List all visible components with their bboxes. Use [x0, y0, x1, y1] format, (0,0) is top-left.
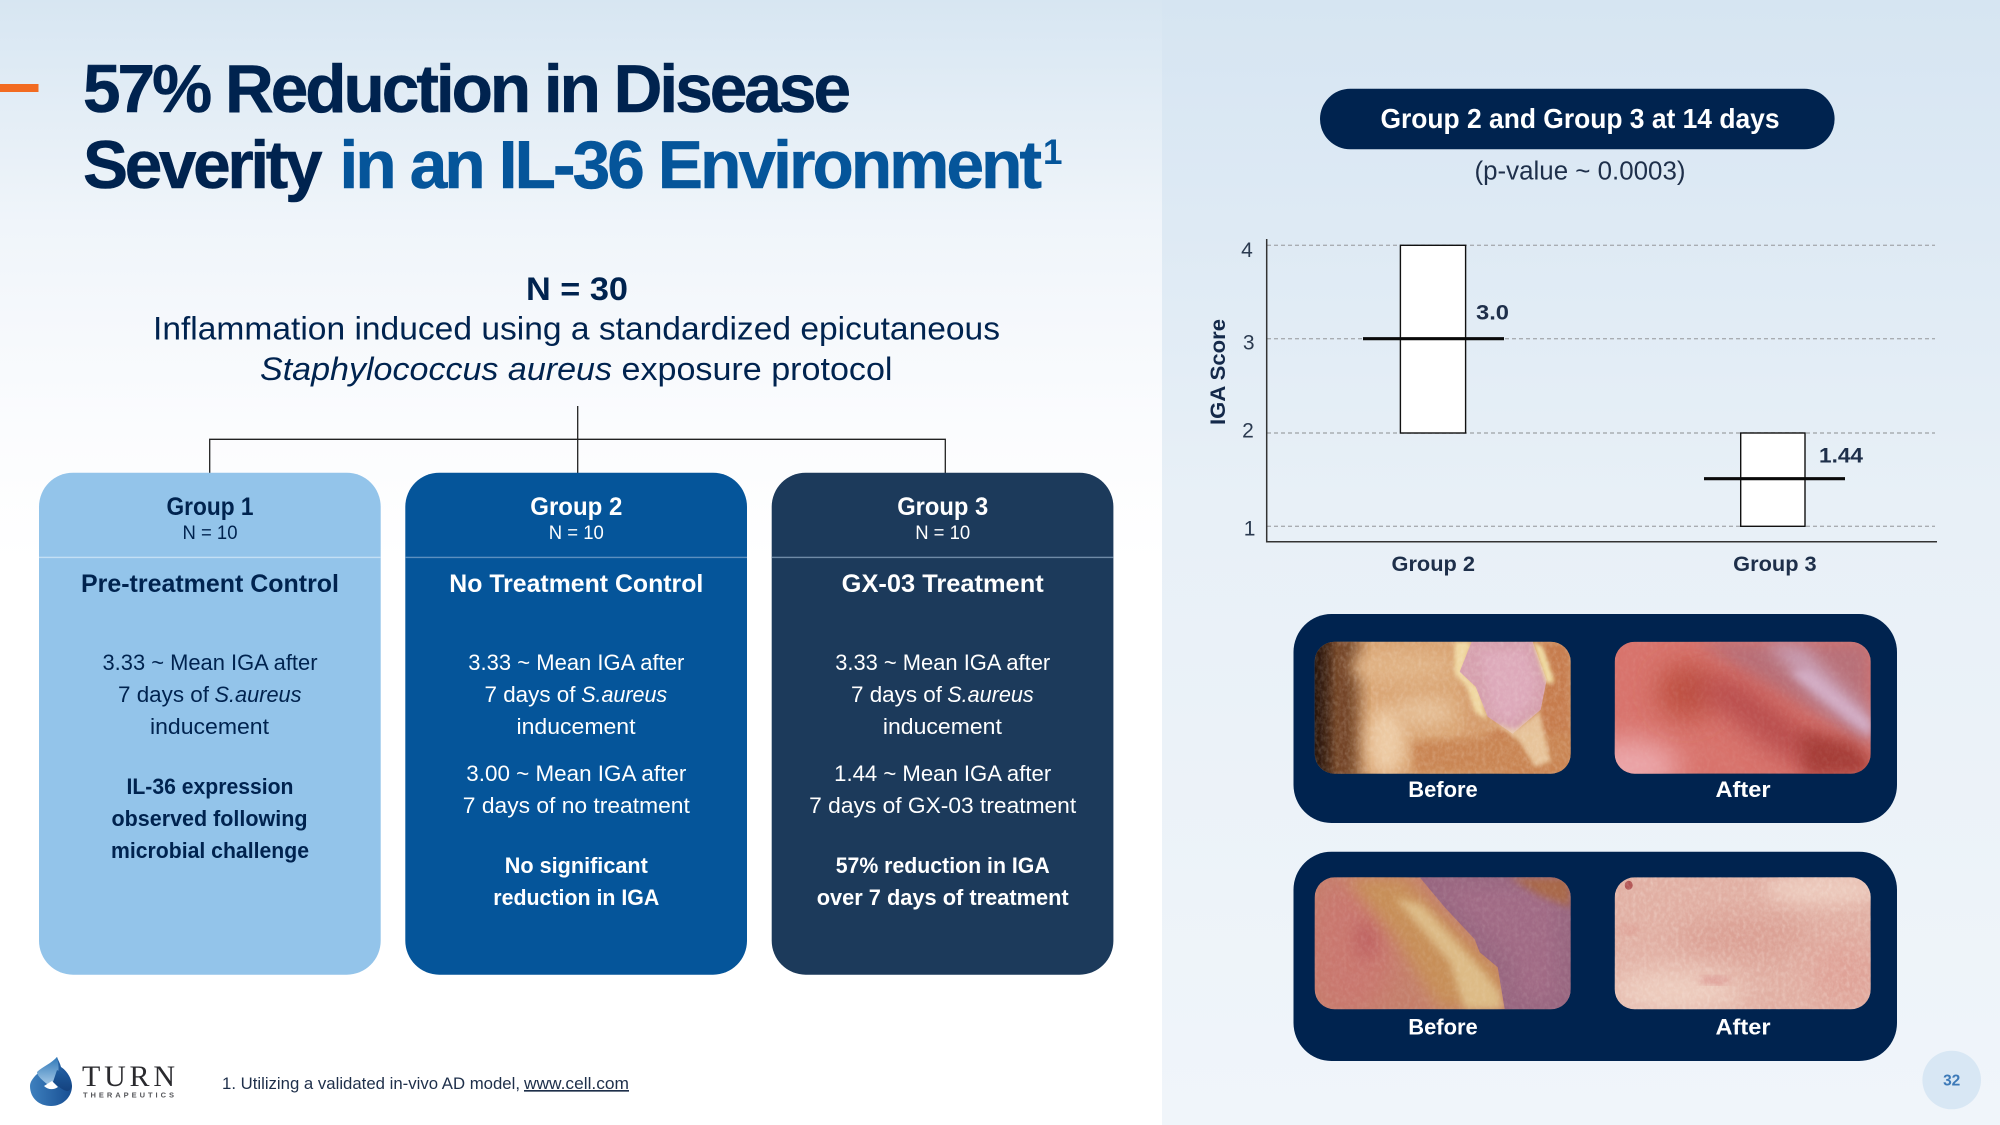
Group 3 body text: 7 days of GX-03 treatment	[809, 793, 1076, 818]
title: 57% Reduction in Disease	[83, 52, 851, 127]
photo: before, top	[1314, 642, 1571, 774]
Group 2 subtitle: No Treatment Control	[449, 570, 703, 598]
accent bar	[0, 84, 38, 92]
Group 2 body text: S.aureus	[581, 682, 667, 707]
Group 3 finding	[817, 853, 1069, 910]
page number: 32	[1943, 1072, 1960, 1090]
Group 3 body text: S.aureus	[947, 682, 1034, 707]
title	[83, 52, 1062, 203]
grid lines	[1267, 245, 1935, 526]
Group 1 body text: 7 days of	[118, 682, 210, 707]
footnote: www.cell.com	[523, 1075, 629, 1093]
y axis tick labels: 1	[1244, 517, 1255, 540]
study description	[153, 271, 1000, 387]
x axis labels	[1392, 553, 1817, 576]
box: Group 3: 1.44	[1819, 445, 1863, 468]
Group 2 sample size: N = 10	[549, 522, 604, 544]
heading pill: Group 2 and Group 3 at 14 days	[1380, 103, 1780, 134]
x axis labels: Group 3	[1733, 553, 1817, 576]
after label, top: After	[1716, 777, 1771, 802]
box: Group 2: 3.0	[1476, 301, 1509, 324]
wordmark subtitle: THERAPEUTICS	[83, 1091, 174, 1100]
after label, bottom: After	[1716, 1015, 1771, 1040]
icon: water drop	[30, 1057, 72, 1106]
Group 2 body text: 7 days of	[484, 682, 576, 707]
Group 1 finding: observed following	[112, 806, 308, 831]
photo: after, bottom	[1614, 877, 1871, 1010]
Group 1 body text	[102, 650, 318, 739]
before label, bottom: Before	[1408, 1015, 1478, 1040]
chart: IGA score	[1206, 239, 1937, 576]
y axis tick labels: 2	[1242, 419, 1254, 442]
Group 1 subtitle: Pre-treatment Control	[81, 570, 339, 598]
Group 1 finding	[111, 774, 309, 863]
photo: after, top	[1614, 642, 1871, 774]
Group 3 heading: Group 3	[897, 493, 988, 521]
Group 1 sample size: N = 10	[182, 522, 238, 544]
panel: Group 2	[405, 473, 747, 975]
y axis title: IGA Score	[1206, 319, 1230, 425]
Group 2 finding: No significant	[505, 853, 648, 878]
wordmark: TURN	[82, 1060, 175, 1093]
Group 2 body text: 3.00 ~ Mean IGA after	[466, 761, 686, 786]
Group 3 body text: 1.44 ~ Mean IGA after	[834, 761, 1051, 786]
background: left area	[0, 0, 1162, 1125]
Group 2 finding: reduction in IGA	[493, 885, 659, 910]
Group 1 body text: inducement	[150, 714, 269, 739]
p-value: (p-value ~ 0.0003)	[1474, 158, 1686, 186]
Group 1 finding: IL-36 expression	[126, 774, 294, 799]
study description: N = 30	[526, 271, 628, 307]
Group 2 heading: Group 2	[530, 493, 622, 521]
Group 2 finding	[493, 853, 659, 910]
logo: Turn Therapeutics	[30, 1057, 175, 1106]
title: 1	[1043, 133, 1062, 172]
Group 3 subtitle: GX-03 Treatment	[842, 570, 1044, 598]
Group 3 body text	[809, 650, 1076, 818]
Group 3 finding: over 7 days of treatment	[817, 885, 1069, 910]
box: Group 2	[1363, 245, 1509, 433]
Group 2 body text	[463, 650, 690, 818]
Group 2 body text: 3.33 ~ Mean IGA after	[468, 650, 684, 675]
Group 3 finding: 57% reduction in IGA	[836, 853, 1050, 878]
background: right panel	[1162, 0, 2000, 1125]
page number	[1922, 1051, 1981, 1109]
x axis labels: Group 2	[1392, 553, 1475, 576]
y axis tick labels	[1241, 239, 1255, 540]
Group 3 body text: 3.33 ~ Mean IGA after	[835, 650, 1050, 675]
study description: Inflammation induced using a standardized epicutaneous	[153, 310, 1000, 346]
Group 2 body text: inducement	[516, 714, 636, 739]
title: Severity	[83, 128, 323, 203]
box: Group 3	[1704, 433, 1863, 526]
Group 3 body text: inducement	[883, 714, 1002, 739]
title: in an IL-36 Environment	[340, 128, 1042, 203]
Group 3 body text: 7 days of	[851, 682, 943, 707]
panel: Group 1	[39, 473, 381, 975]
panel: before and after photos, bottom	[1294, 852, 1897, 1061]
panel: Group 3	[772, 473, 1113, 975]
y axis tick labels: 3	[1243, 331, 1255, 354]
photo: before, bottom	[1305, 877, 1571, 1017]
heading pill	[1320, 89, 1835, 149]
study description: Staphylococcus aureus	[260, 351, 612, 387]
connector lines	[210, 406, 945, 475]
study description: exposure protocol	[622, 351, 892, 387]
Group 1 body text: 3.33 ~ Mean IGA after	[102, 650, 318, 675]
Group 1 heading: Group 1	[166, 493, 254, 521]
Group 1 finding: microbial challenge	[111, 838, 309, 863]
panel: before and after photos, top	[1294, 614, 1897, 823]
Group 2 body text: 7 days of no treatment	[463, 793, 690, 818]
axes	[1267, 239, 1937, 542]
before label, top: Before	[1408, 777, 1478, 802]
Group 3 sample size: N = 10	[915, 522, 970, 544]
Group 1 body text: S.aureus	[214, 682, 302, 707]
footnote: 1. Utilizing a validated in-vivo AD model,	[222, 1075, 520, 1093]
y axis tick labels: 4	[1241, 239, 1253, 262]
